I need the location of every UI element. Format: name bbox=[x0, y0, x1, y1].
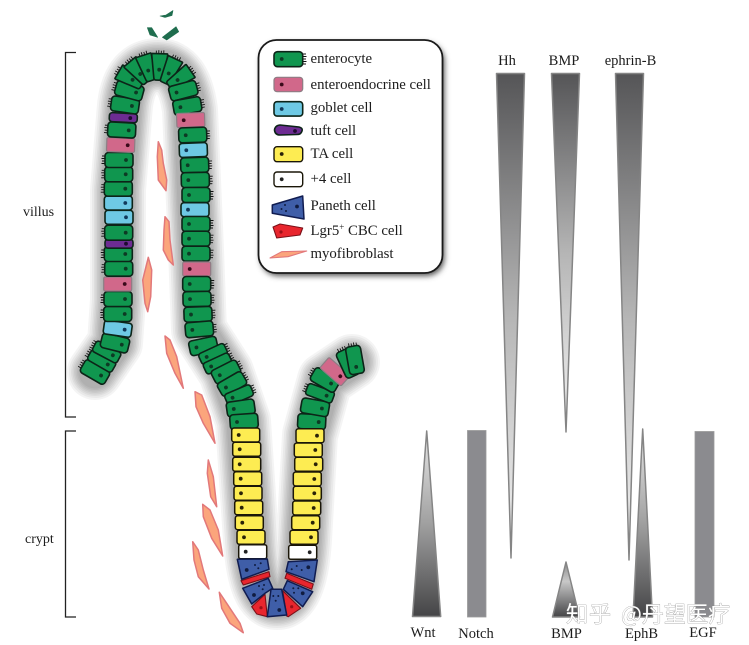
legend: tuft cell bbox=[274, 123, 356, 139]
watermark: @丹望医疗 bbox=[621, 597, 730, 629]
label: crypt: crypt bbox=[25, 532, 54, 547]
villus left wall cells bbox=[76, 79, 145, 385]
gradient: ephrin-B: ephrin-B bbox=[605, 53, 656, 69]
legend: myofibroblast: myofibroblast bbox=[310, 246, 394, 262]
Paneth cells bbox=[237, 559, 317, 617]
gradient: EphB: EphB bbox=[625, 626, 658, 642]
gradient: Hh: Hh bbox=[498, 53, 517, 69]
legend: Lgr5+ CBC cell: + bbox=[339, 222, 344, 232]
legend: TA cell: TA cell bbox=[310, 146, 353, 162]
legend: TA cell bbox=[274, 146, 353, 162]
gradient: BMP villus: BMP bbox=[549, 53, 579, 69]
watermark: 知乎 bbox=[566, 597, 611, 629]
legend: enterocyte bbox=[274, 51, 373, 67]
legend box shadow bbox=[260, 43, 444, 276]
legend: +4 cell bbox=[274, 171, 351, 187]
legend: myofibroblast bbox=[270, 246, 394, 262]
legend: goblet cell: goblet cell bbox=[310, 100, 373, 116]
gradient: BMP crypt bbox=[551, 562, 582, 642]
legend: +4 cell: +4 cell bbox=[310, 171, 351, 187]
gradient: EphB bbox=[625, 429, 658, 642]
panel: legend bbox=[258, 40, 444, 276]
legend: Lgr5+ CBC cell: Lgr5 bbox=[310, 223, 339, 239]
villus tip cells bbox=[112, 50, 198, 93]
cell nuclei and granules bbox=[245, 562, 310, 612]
+4 cells bbox=[239, 545, 317, 559]
villus right wall cells bbox=[168, 79, 217, 338]
legend: Paneth cell: Paneth cell bbox=[310, 198, 376, 214]
bracket: villus bbox=[66, 52, 76, 417]
legend: goblet cell bbox=[274, 100, 373, 116]
legend box bbox=[258, 40, 442, 273]
legend: tuft cell: tuft cell bbox=[310, 123, 356, 139]
icon: shed enterocytes bbox=[147, 10, 179, 40]
Lgr5 CBC cells bbox=[241, 572, 313, 617]
legend: Lgr5+ CBC cell bbox=[273, 222, 403, 239]
watermark bbox=[566, 597, 730, 629]
gradient: BMP crypt: BMP bbox=[551, 626, 582, 642]
crypt right upper wall cells bbox=[297, 341, 365, 430]
bar: Notch: Notch bbox=[458, 626, 494, 642]
legend: Paneth cell bbox=[272, 196, 376, 219]
bar: EGF: EGF bbox=[689, 625, 717, 641]
villus to crypt transition cells bbox=[188, 336, 258, 430]
legend: Lgr5+ CBC cell: CBC cell bbox=[344, 223, 403, 239]
legend: enterocyte: enterocyte bbox=[310, 51, 373, 67]
epithelium: villus and crypt cells bbox=[76, 50, 365, 617]
bar: Notch bbox=[458, 430, 494, 642]
myofibroblasts bbox=[143, 142, 243, 633]
gradient: BMP villus bbox=[549, 53, 580, 432]
legend: enteroendocrine cell: enteroendocrine cell bbox=[310, 77, 431, 93]
gradient: Hh bbox=[496, 53, 524, 558]
gradient: ephrin-B bbox=[605, 53, 656, 560]
gradient: Wnt: Wnt bbox=[411, 625, 435, 641]
bracket: crypt bbox=[66, 431, 76, 617]
bar: EGF bbox=[689, 432, 717, 641]
gradient: Wnt bbox=[411, 431, 441, 641]
epithelium soft shadow bbox=[95, 66, 352, 602]
TA cells bbox=[232, 428, 324, 544]
label: villus: villus bbox=[23, 205, 54, 220]
